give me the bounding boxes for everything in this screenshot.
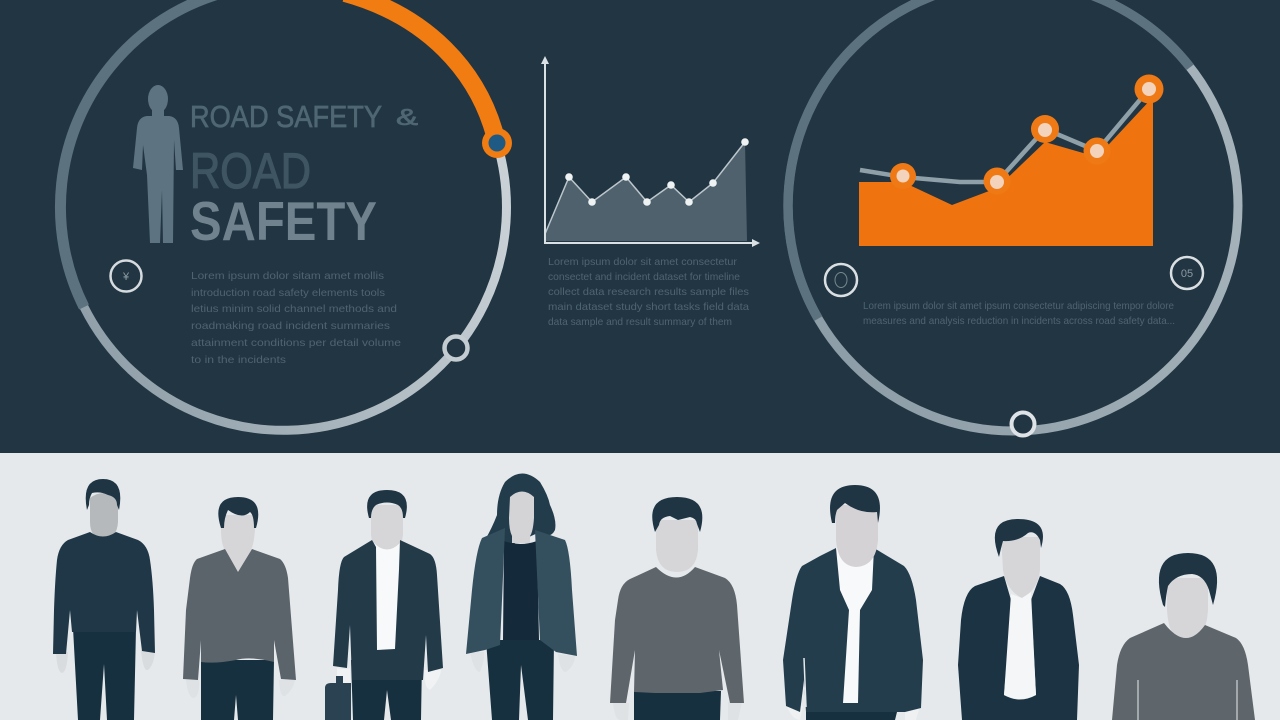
person 3: jacket with briefcase: [325, 490, 443, 720]
middle body text: [548, 256, 749, 328]
light lower background: [0, 453, 1280, 720]
person 8: grey sweater partial: [1112, 553, 1255, 720]
orange area chart: [859, 97, 1153, 246]
left body text: attainment conditions per detail volume: [191, 337, 401, 349]
heading: safety: SAFETY: [190, 190, 377, 252]
icon: briefcase: [325, 676, 351, 720]
left ring dark arc: [60, 0, 338, 307]
left body text: introduction road safety elements tools: [191, 287, 385, 299]
panel: right circle with chart: [788, 0, 1238, 436]
left body text: roadmaking road incident summaries: [191, 320, 390, 332]
chart line and points: [545, 138, 749, 234]
dark upper background: [0, 0, 1280, 453]
icon: standing person: [133, 85, 183, 243]
right ring light arc: [788, 0, 1238, 431]
orange ring node: [482, 128, 512, 158]
person 5: grey sweater: [610, 497, 744, 720]
left body text: [191, 270, 401, 366]
people row: [53, 474, 1255, 720]
heading: road safety line one: ROAD SAFETY: [190, 99, 382, 134]
right ring dark arc: [788, 0, 1238, 431]
right body text: Lorem ipsum dolor sit amet ipsum consectetur adipiscing tempor dolore: [863, 300, 1174, 312]
person 6: jacket and white shirt: [783, 485, 923, 720]
person 1: dark sweater: [53, 479, 155, 720]
right body text: measures and analysis reduction in incidents across road safety data...: [863, 315, 1175, 327]
chart markers: [890, 74, 1164, 194]
person 4: long hair hooded jacket: [466, 474, 577, 720]
middle body text: collect data research results sample files: [548, 286, 749, 298]
middle body text: data sample and result summary of them: [548, 316, 732, 328]
icon: left badge: [825, 264, 857, 296]
icon: right badge: [1171, 257, 1203, 289]
panel: middle chart: [541, 56, 760, 328]
person 2: grey shirt: [183, 497, 296, 720]
left ring light arc: [84, 143, 506, 430]
heading: road safety line one: &: [396, 104, 418, 130]
middle body text: Lorem ipsum dolor sit amet consectetur: [548, 256, 738, 268]
icon: small badge left: ¥: [122, 271, 130, 283]
left body text: letius minim solid channel methods and: [191, 303, 397, 315]
icon: small badge left: [110, 260, 142, 292]
middle body text: main dataset study short tasks field data: [548, 301, 749, 313]
middle body text: consectet and incident dataset for timeline: [548, 271, 740, 283]
light ring node: [444, 336, 468, 360]
bottom ring node: [1012, 412, 1034, 436]
right body text: [863, 300, 1175, 327]
person 7: black jacket and white scarf: [958, 519, 1079, 720]
heading: road: ROAD: [190, 143, 311, 199]
panel: left circle with title: [60, 0, 512, 430]
icon: right badge: 05: [1181, 268, 1193, 280]
chart axes: [541, 56, 760, 247]
grey trend line: [860, 89, 1149, 182]
left body text: to in the incidents: [191, 354, 286, 366]
left body text: Lorem ipsum dolor sitam amet mollis: [191, 270, 384, 282]
left ring orange arc: [345, 0, 497, 143]
line chart area: [545, 142, 747, 241]
